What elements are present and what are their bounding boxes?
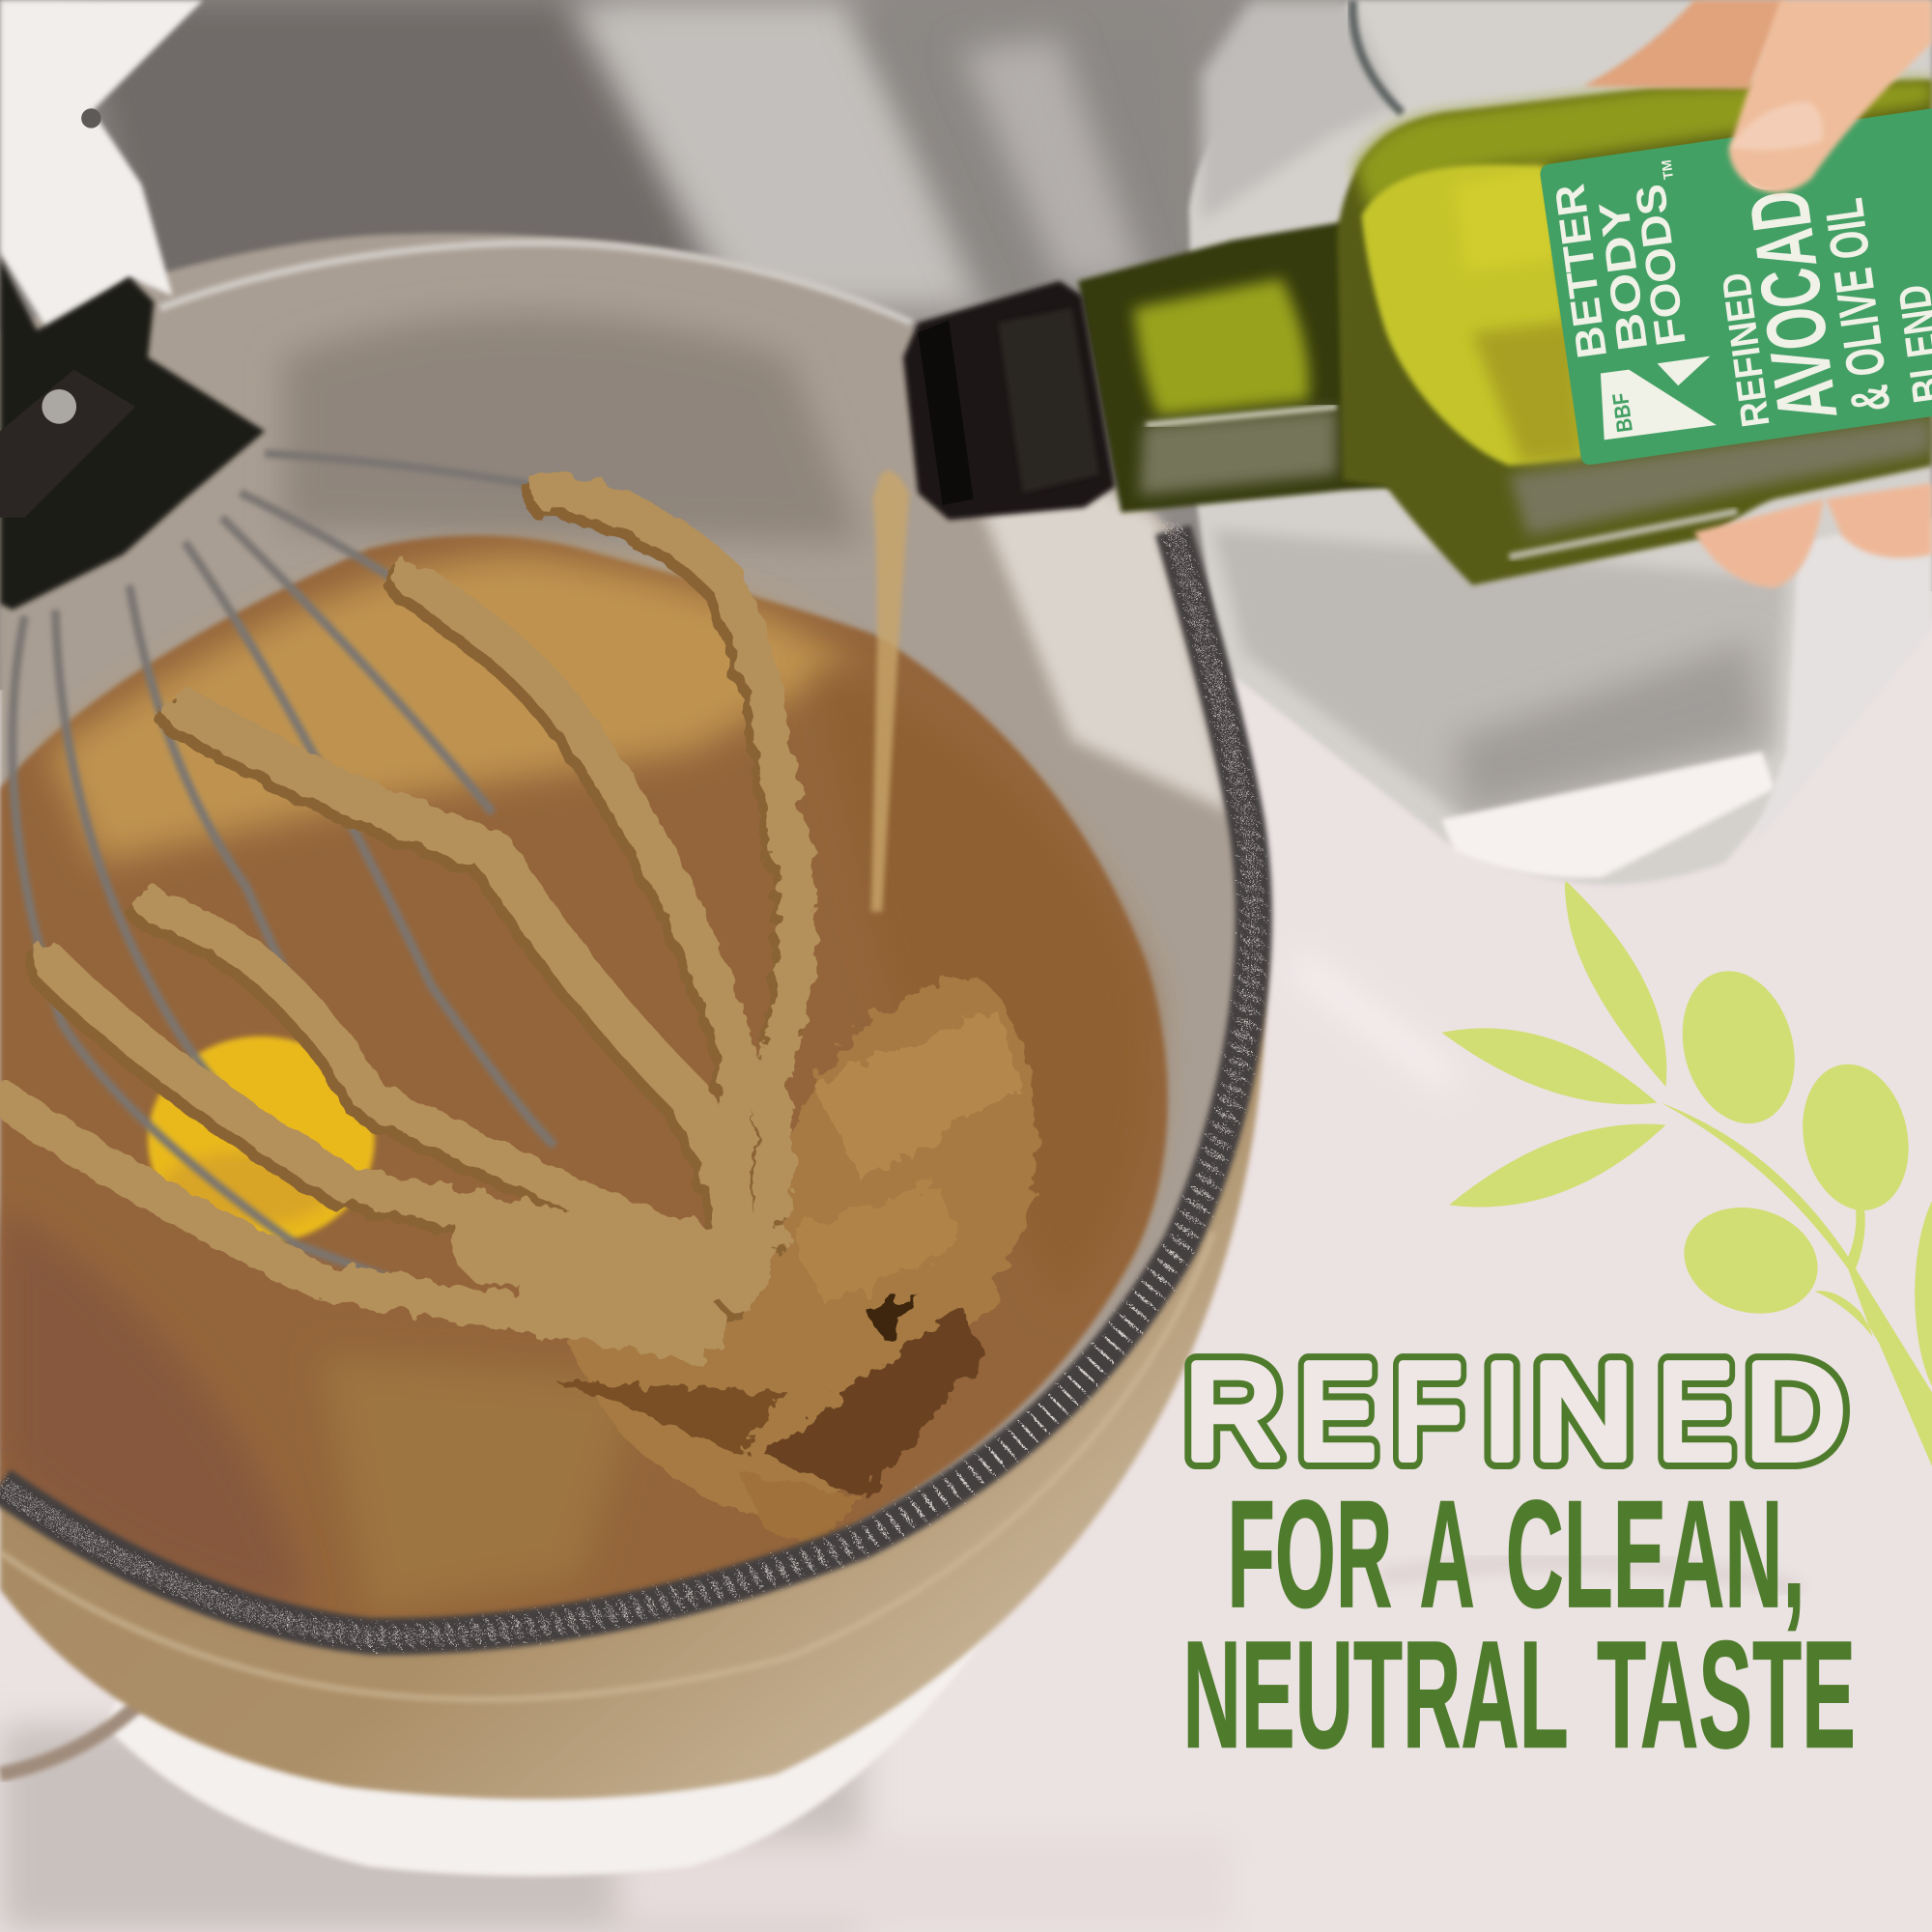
leaf 1 [1565,882,1666,1087]
bottle lower reflection [1509,416,1932,536]
egg yolk [148,1037,375,1243]
olive 4 [1915,1177,1932,1410]
bottle neck [1078,222,1399,513]
headline [1182,1337,1856,1780]
headline: neutral taste: NEUTRAL [1182,1609,1569,1780]
headline: refined: N [1534,1337,1633,1487]
strand shadows [42,499,791,1302]
brand name: BODY [1591,198,1657,354]
bottle body [1337,80,1932,585]
mixer base [104,1528,1060,1876]
headline: refined: I [1484,1337,1520,1487]
bottle label: & OLIVE OIL [1812,195,1902,415]
mixer handle [0,1698,146,1775]
headline: refined: R [1185,1337,1282,1487]
leaf 3 [1449,1124,1665,1208]
batter strands [0,491,798,1343]
brand logo: BBF [1607,391,1637,434]
headline: refined: I [1484,1337,1520,1487]
headline: refined: D [1746,1337,1844,1487]
bowl outer glass wall [0,788,1266,1800]
headline: refined: R [1185,1337,1282,1487]
bowl back glass [0,234,1254,1636]
hand: thumb [1729,0,1932,193]
headline: for a clean: A [1419,1468,1475,1639]
brand name: FOODS [1628,182,1695,349]
bowl measure lines [0,1233,1213,1699]
whisk shaft [0,0,203,332]
bottle cap [903,281,1115,520]
whisk head [0,259,265,610]
flour container [1189,0,1932,885]
batter lumps [554,974,1037,1547]
brand name [1556,160,1685,357]
oil stream [871,470,909,912]
bottle label [1540,108,1932,465]
headline: refined: E [1659,1337,1732,1487]
brand name: BETTER [1547,182,1616,361]
leaf 2 [1441,1028,1658,1104]
brand name: TM [1659,158,1676,181]
bottle label: AVOCADO [1726,143,1856,427]
batter pool [0,535,1168,1629]
headline: refined: F [1394,1337,1462,1487]
hand: palm behind thumb [1583,0,1786,89]
bottle [903,0,1932,587]
headline: refined: N [1534,1337,1633,1487]
headline: refined [1185,1337,1844,1487]
headline: refined: E [1298,1337,1375,1487]
branch stem [1661,1103,1932,1466]
rim band [0,529,1254,1636]
headline: refined: E [1659,1337,1732,1487]
olive 3 [1672,1193,1830,1328]
hand: lower fingers [1694,483,1932,587]
headline: refined: E [1298,1337,1375,1487]
thumbnail [1730,101,1823,151]
mixing bowl [0,234,1266,1800]
brand logo [1601,356,1717,440]
olive 1 [1666,958,1811,1136]
headline: for a clean [1227,1468,1805,1639]
olive 2 [1790,1054,1921,1220]
whisk [0,0,798,1343]
olive branch [1441,882,1932,1466]
whisk wires [13,453,591,1293]
product name: REFINED [1713,270,1778,430]
headline: refined: F [1394,1337,1462,1487]
headline: for a clean: FOR [1227,1468,1392,1639]
headline: refined: D [1746,1337,1844,1487]
rim flour speckle [0,529,1254,1636]
